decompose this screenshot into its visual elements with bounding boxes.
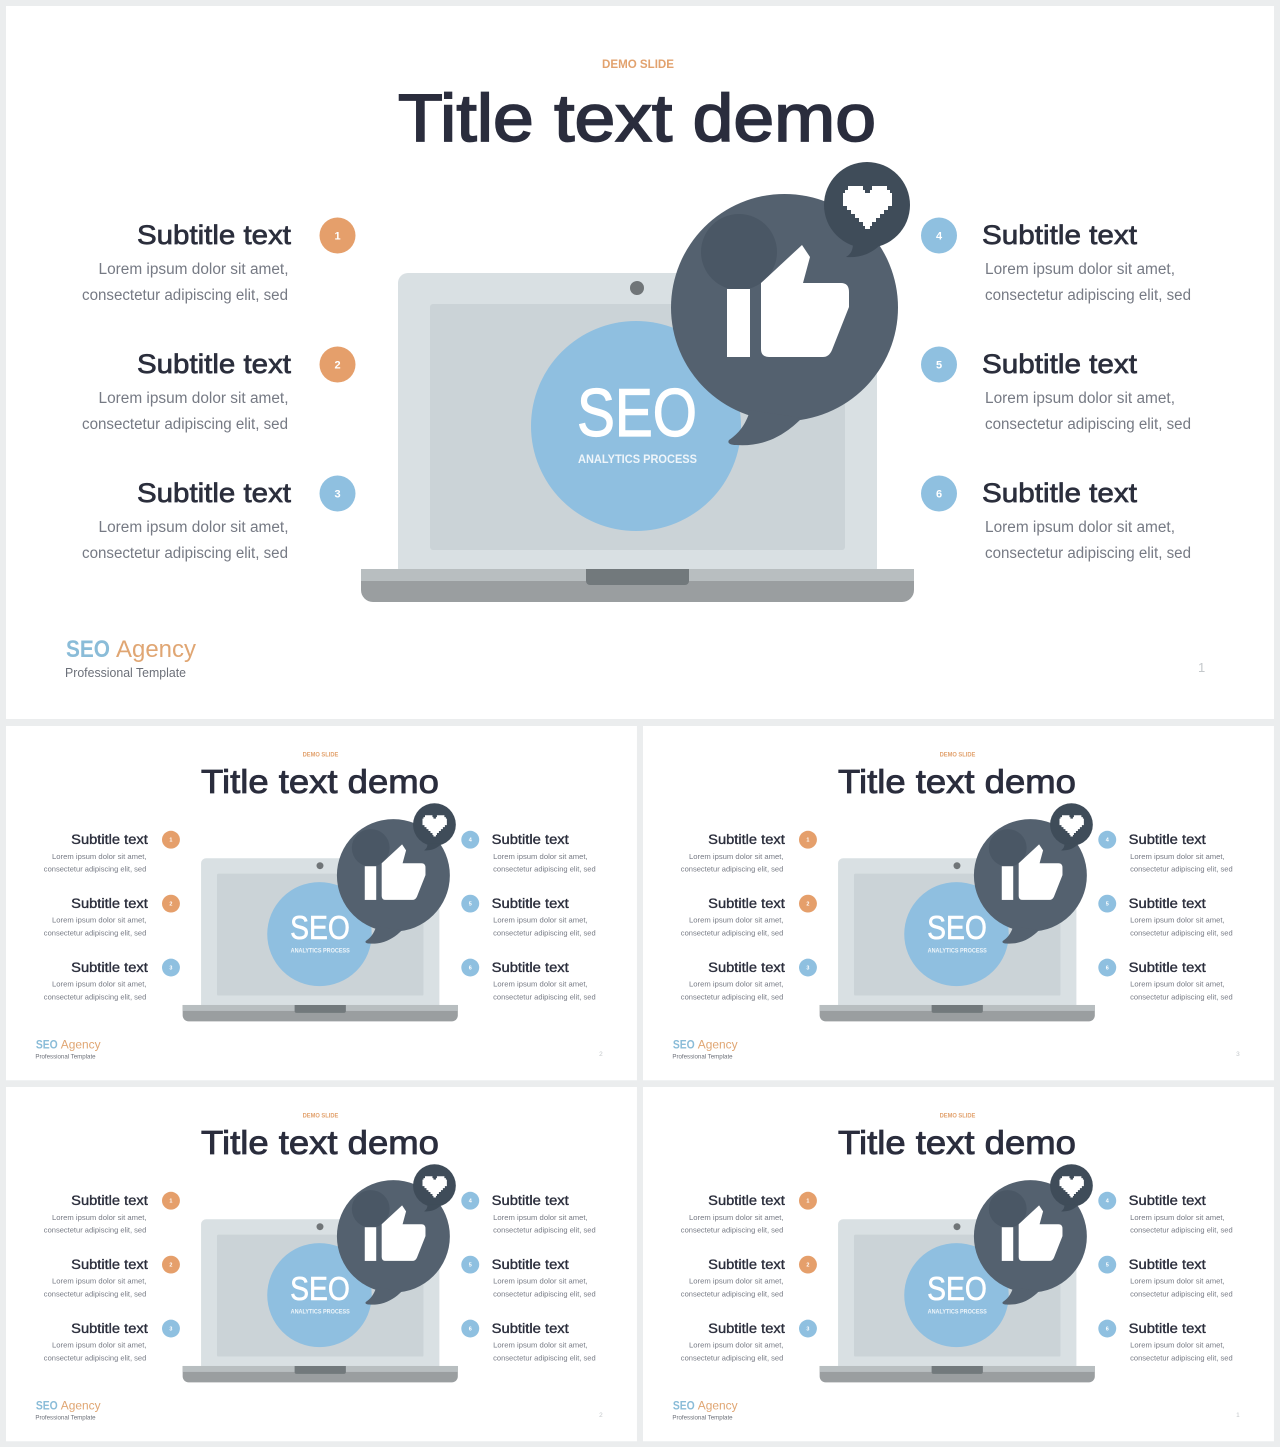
body text left: Lorem ipsum dolor sit amet, <box>689 852 784 861</box>
item 2 <box>82 346 356 433</box>
badge 3 <box>320 476 356 512</box>
badges left: 2 <box>169 1263 172 1269</box>
body text right: Lorem ipsum dolor sit amet, <box>1130 1277 1225 1286</box>
badges left: 2 <box>806 902 809 908</box>
SEO circle <box>904 882 1009 986</box>
body text left <box>681 852 784 1002</box>
item 3 <box>82 476 356 562</box>
subtitles left: Subtitle text <box>708 1193 785 1208</box>
heart speech bubble <box>1050 1164 1093 1211</box>
logo: Agency <box>698 1038 738 1052</box>
logo <box>35 1038 101 1060</box>
thumbs-up speech bubble <box>974 819 1087 944</box>
logo: Agency <box>61 1399 101 1413</box>
subtitle 2: Subtitle text <box>137 349 292 379</box>
subtitles right <box>1129 832 1206 975</box>
item 5 <box>921 346 1191 433</box>
body 3 <box>82 519 288 562</box>
subtitles right: Subtitle text <box>492 1321 569 1336</box>
logo: SEO <box>66 636 110 663</box>
subtitles left <box>71 1193 148 1336</box>
body text right: consectetur adipiscing elit, sed <box>493 929 596 938</box>
subtitles right: Subtitle text <box>1129 832 1206 847</box>
body text right: Lorem ipsum dolor sit amet, <box>493 852 588 861</box>
body 5: Lorem ipsum dolor sit amet, <box>985 390 1175 407</box>
badge 6 <box>921 476 957 512</box>
SEO circle: SEO <box>927 1270 987 1308</box>
badges right <box>461 1192 479 1337</box>
badges right: 6 <box>469 966 472 972</box>
SEO circle: ANALYTICS PROCESS <box>928 1309 987 1315</box>
SEO circle: ANALYTICS PROCESS <box>928 948 987 954</box>
body text left: Lorem ipsum dolor sit amet, <box>689 916 784 925</box>
thumbs-up speech bubble <box>337 819 450 944</box>
body text left: Lorem ipsum dolor sit amet, <box>689 980 784 989</box>
body text left: Lorem ipsum dolor sit amet, <box>52 980 147 989</box>
body 2: Lorem ipsum dolor sit amet, <box>98 390 288 407</box>
slide 1: large panel <box>6 6 1274 719</box>
body text left: consectetur adipiscing elit, sed <box>44 865 146 874</box>
SEO circle: ANALYTICS PROCESS <box>291 1309 350 1315</box>
subtitles right: Subtitle text <box>492 832 569 847</box>
badge 2 <box>320 346 356 382</box>
subtitles left <box>708 1193 785 1336</box>
badges left: 1 <box>806 1199 809 1205</box>
subtitles right: Subtitle text <box>492 1257 569 1272</box>
logo: SEO <box>36 1399 58 1413</box>
body 1 <box>82 261 288 304</box>
badges left: 1 <box>169 1199 172 1205</box>
badges left: 2 <box>169 902 172 908</box>
SEO circle: SEO <box>577 375 697 451</box>
slide 4: small panel bottom left <box>6 1087 637 1441</box>
heart speech bubble <box>413 803 456 850</box>
body text left: consectetur adipiscing elit, sed <box>44 1226 146 1235</box>
badges left <box>162 1192 180 1337</box>
SEO circle: SEO <box>927 909 987 947</box>
subtitles left: Subtitle text <box>71 960 148 975</box>
body text right: Lorem ipsum dolor sit amet, <box>1130 980 1225 989</box>
subtitle 3: Subtitle text <box>137 478 292 508</box>
badges left <box>162 831 180 976</box>
body text right: consectetur adipiscing elit, sed <box>1130 1226 1233 1235</box>
panel background <box>6 1087 637 1441</box>
body text right <box>1130 852 1233 1002</box>
body text right <box>493 852 596 1002</box>
badges right <box>1098 1192 1116 1337</box>
heart speech bubble <box>824 162 910 257</box>
items right <box>1098 831 1233 1002</box>
SEO circle <box>904 1243 1009 1347</box>
badges right: 6 <box>1106 1327 1109 1333</box>
subtitles left <box>708 832 785 975</box>
body 4 <box>985 261 1191 304</box>
page number: 2 <box>599 1051 603 1058</box>
subtitles left: Subtitle text <box>71 832 148 847</box>
page number: 1 <box>1236 1412 1240 1419</box>
body 1: consectetur adipiscing elit, sed <box>82 287 288 304</box>
page number: 3 <box>1236 1051 1240 1058</box>
subtitle 4: Subtitle text <box>982 220 1138 250</box>
SEO circle: ANALYTICS PROCESS <box>291 948 350 954</box>
body text right: consectetur adipiscing elit, sed <box>493 865 596 874</box>
SEO circle <box>267 882 372 986</box>
SEO circle <box>267 1243 372 1347</box>
thumbs-up speech bubble <box>671 194 898 445</box>
body 3: consectetur adipiscing elit, sed <box>82 545 288 562</box>
item 1 <box>82 218 356 304</box>
thumbs-up speech bubble <box>337 1180 450 1305</box>
slide 3: small panel top right <box>643 726 1274 1080</box>
SEO circle: SEO <box>290 1270 350 1308</box>
subtitles right: Subtitle text <box>492 960 569 975</box>
subtitles right: Subtitle text <box>1129 1321 1206 1336</box>
body 5 <box>985 390 1191 433</box>
logo: Agency <box>116 636 196 663</box>
heart speech bubble <box>413 1164 456 1211</box>
body text right: consectetur adipiscing elit, sed <box>1130 1354 1233 1363</box>
body text right: Lorem ipsum dolor sit amet, <box>493 980 588 989</box>
kicker: DEMO SLIDE <box>602 57 674 71</box>
body text left: consectetur adipiscing elit, sed <box>681 1290 783 1299</box>
body text right: Lorem ipsum dolor sit amet, <box>493 1277 588 1286</box>
body 1: Lorem ipsum dolor sit amet, <box>98 261 288 278</box>
items right <box>461 831 596 1002</box>
badge 4: 4 <box>936 230 943 242</box>
body 6: consectetur adipiscing elit, sed <box>985 545 1191 562</box>
SEO circle: SEO <box>290 909 350 947</box>
badges left: 2 <box>806 1263 809 1269</box>
logo: Professional Template <box>672 1053 733 1060</box>
title: Title text demo <box>838 1125 1076 1162</box>
laptop illustration <box>361 273 914 602</box>
subtitles right: Subtitle text <box>492 896 569 911</box>
body text right: consectetur adipiscing elit, sed <box>1130 929 1233 938</box>
badge 6: 6 <box>936 488 942 500</box>
logo: SEO <box>36 1038 58 1052</box>
title: Title text demo <box>201 1125 439 1162</box>
body text left <box>44 852 147 1002</box>
body text right: consectetur adipiscing elit, sed <box>493 993 596 1002</box>
badges left <box>799 1192 817 1337</box>
body text left: Lorem ipsum dolor sit amet, <box>689 1277 784 1286</box>
badges right: 6 <box>1106 966 1109 972</box>
kicker: DEMO SLIDE <box>940 753 975 759</box>
items right <box>1098 1192 1233 1363</box>
title: Title text demo <box>201 764 439 801</box>
subtitles left: Subtitle text <box>708 960 785 975</box>
body 3: Lorem ipsum dolor sit amet, <box>98 519 288 536</box>
body text right <box>493 1213 596 1363</box>
badge 1 <box>320 218 356 254</box>
items left <box>44 1192 180 1363</box>
badges right: 5 <box>1106 1263 1109 1269</box>
body text left: consectetur adipiscing elit, sed <box>44 929 146 938</box>
laptop illustration <box>183 858 458 1021</box>
kicker: DEMO SLIDE <box>303 753 338 759</box>
body text left: consectetur adipiscing elit, sed <box>681 993 783 1002</box>
heart speech bubble <box>1050 803 1093 850</box>
logo: Agency <box>61 1038 101 1052</box>
body text left: consectetur adipiscing elit, sed <box>681 1354 783 1363</box>
panel background <box>643 1087 1274 1441</box>
body 5: consectetur adipiscing elit, sed <box>985 416 1191 433</box>
body text right: Lorem ipsum dolor sit amet, <box>1130 1213 1225 1222</box>
laptop illustration <box>820 858 1095 1021</box>
SEO circle: ANALYTICS PROCESS <box>578 452 697 466</box>
page number: 2 <box>599 1412 603 1419</box>
subtitles left: Subtitle text <box>708 1257 785 1272</box>
badges right: 4 <box>469 838 472 844</box>
body text right: consectetur adipiscing elit, sed <box>1130 993 1233 1002</box>
body text left: Lorem ipsum dolor sit amet, <box>689 1341 784 1350</box>
badges right: 5 <box>469 1263 472 1269</box>
item 4 <box>921 218 1191 304</box>
laptop illustration <box>183 1219 458 1382</box>
body text left <box>44 1213 147 1363</box>
logo: Professional Template <box>35 1053 96 1060</box>
slide 5: small panel bottom right <box>643 1087 1274 1441</box>
logo <box>35 1399 101 1421</box>
panel background <box>643 726 1274 1080</box>
body text right: consectetur adipiscing elit, sed <box>493 1290 596 1299</box>
badges right: 4 <box>469 1199 472 1205</box>
subtitles left: Subtitle text <box>71 1257 148 1272</box>
body text right: consectetur adipiscing elit, sed <box>1130 865 1233 874</box>
subtitles right: Subtitle text <box>1129 1193 1206 1208</box>
subtitle 1: Subtitle text <box>137 220 292 250</box>
thumbs-up speech bubble <box>974 1180 1087 1305</box>
subtitles right <box>492 1193 569 1336</box>
badges left <box>799 831 817 976</box>
logo: Professional Template <box>65 666 186 680</box>
body text left: Lorem ipsum dolor sit amet, <box>52 852 147 861</box>
badges left: 3 <box>806 966 809 972</box>
badge 3: 3 <box>334 488 341 500</box>
subtitles right: Subtitle text <box>1129 896 1206 911</box>
logo: Agency <box>698 1399 738 1413</box>
SEO circle <box>531 321 741 531</box>
body text left: Lorem ipsum dolor sit amet, <box>52 1277 147 1286</box>
subtitles left: Subtitle text <box>708 896 785 911</box>
items right <box>461 1192 596 1363</box>
badge 5 <box>921 346 957 382</box>
logo: SEO <box>673 1399 695 1413</box>
subtitles left: Subtitle text <box>71 1193 148 1208</box>
laptop illustration <box>820 1219 1095 1382</box>
logo: SEO <box>673 1038 695 1052</box>
body text right: Lorem ipsum dolor sit amet, <box>1130 852 1225 861</box>
item 6 <box>921 476 1191 562</box>
body 2 <box>82 390 288 433</box>
items left <box>681 1192 817 1363</box>
subtitles left: Subtitle text <box>708 1321 785 1336</box>
badges right: 4 <box>1106 1199 1109 1205</box>
subtitle 5: Subtitle text <box>982 349 1138 379</box>
badge 5: 5 <box>936 360 942 372</box>
body text left: consectetur adipiscing elit, sed <box>44 1290 146 1299</box>
body 6 <box>985 519 1191 562</box>
badges right: 6 <box>469 1327 472 1333</box>
body text left: consectetur adipiscing elit, sed <box>681 865 783 874</box>
subtitles left: Subtitle text <box>708 832 785 847</box>
logo <box>672 1038 738 1060</box>
panel background <box>6 6 1274 719</box>
body text left <box>681 1213 784 1363</box>
items left <box>44 831 180 1002</box>
body text left: consectetur adipiscing elit, sed <box>44 1354 146 1363</box>
badges left: 1 <box>169 838 172 844</box>
slide 2: small panel top left <box>6 726 637 1080</box>
body text right: consectetur adipiscing elit, sed <box>1130 1290 1233 1299</box>
subtitles left: Subtitle text <box>71 1321 148 1336</box>
badge 1: 1 <box>334 230 341 242</box>
badges right <box>1098 831 1116 976</box>
body text right: Lorem ipsum dolor sit amet, <box>493 916 588 925</box>
badges right: 5 <box>469 902 472 908</box>
body text left: consectetur adipiscing elit, sed <box>681 929 783 938</box>
body text left: Lorem ipsum dolor sit amet, <box>52 916 147 925</box>
kicker: DEMO SLIDE <box>940 1114 975 1120</box>
badges left: 3 <box>169 1327 172 1333</box>
body 2: consectetur adipiscing elit, sed <box>82 416 288 433</box>
kicker: DEMO SLIDE <box>303 1114 338 1120</box>
body text left: Lorem ipsum dolor sit amet, <box>52 1213 147 1222</box>
page number: 1 <box>1198 660 1205 675</box>
badge 2: 2 <box>334 360 341 372</box>
body text right: Lorem ipsum dolor sit amet, <box>1130 1341 1225 1350</box>
badges right: 5 <box>1106 902 1109 908</box>
body 6: Lorem ipsum dolor sit amet, <box>985 519 1175 536</box>
body text right: Lorem ipsum dolor sit amet, <box>1130 916 1225 925</box>
subtitles right <box>1129 1193 1206 1336</box>
badge 4 <box>921 218 957 254</box>
subtitles right: Subtitle text <box>492 1193 569 1208</box>
subtitles left: Subtitle text <box>71 896 148 911</box>
title: Title text demo <box>838 764 1076 801</box>
badges left: 3 <box>806 1327 809 1333</box>
body text left: Lorem ipsum dolor sit amet, <box>689 1213 784 1222</box>
badges left: 1 <box>806 838 809 844</box>
logo: Professional Template <box>35 1414 96 1421</box>
body text left: Lorem ipsum dolor sit amet, <box>52 1341 147 1350</box>
body text right: consectetur adipiscing elit, sed <box>493 1226 596 1235</box>
body text right: Lorem ipsum dolor sit amet, <box>493 1341 588 1350</box>
logo: Professional Template <box>672 1414 733 1421</box>
subtitles right: Subtitle text <box>1129 960 1206 975</box>
subtitles right: Subtitle text <box>1129 1257 1206 1272</box>
badges right <box>461 831 479 976</box>
subtitle 6: Subtitle text <box>982 478 1138 508</box>
badges left: 3 <box>169 966 172 972</box>
title: Title text demo <box>398 81 876 156</box>
body text right <box>1130 1213 1233 1363</box>
subtitles right <box>492 832 569 975</box>
logo <box>65 636 196 680</box>
panel background <box>6 726 637 1080</box>
body 4: Lorem ipsum dolor sit amet, <box>985 261 1175 278</box>
badges right: 4 <box>1106 838 1109 844</box>
subtitles left <box>71 832 148 975</box>
body text right: Lorem ipsum dolor sit amet, <box>493 1213 588 1222</box>
body 4: consectetur adipiscing elit, sed <box>985 287 1191 304</box>
body text left: consectetur adipiscing elit, sed <box>681 1226 783 1235</box>
logo <box>672 1399 738 1421</box>
body text left: consectetur adipiscing elit, sed <box>44 993 146 1002</box>
items left <box>681 831 817 1002</box>
body text right: consectetur adipiscing elit, sed <box>493 1354 596 1363</box>
